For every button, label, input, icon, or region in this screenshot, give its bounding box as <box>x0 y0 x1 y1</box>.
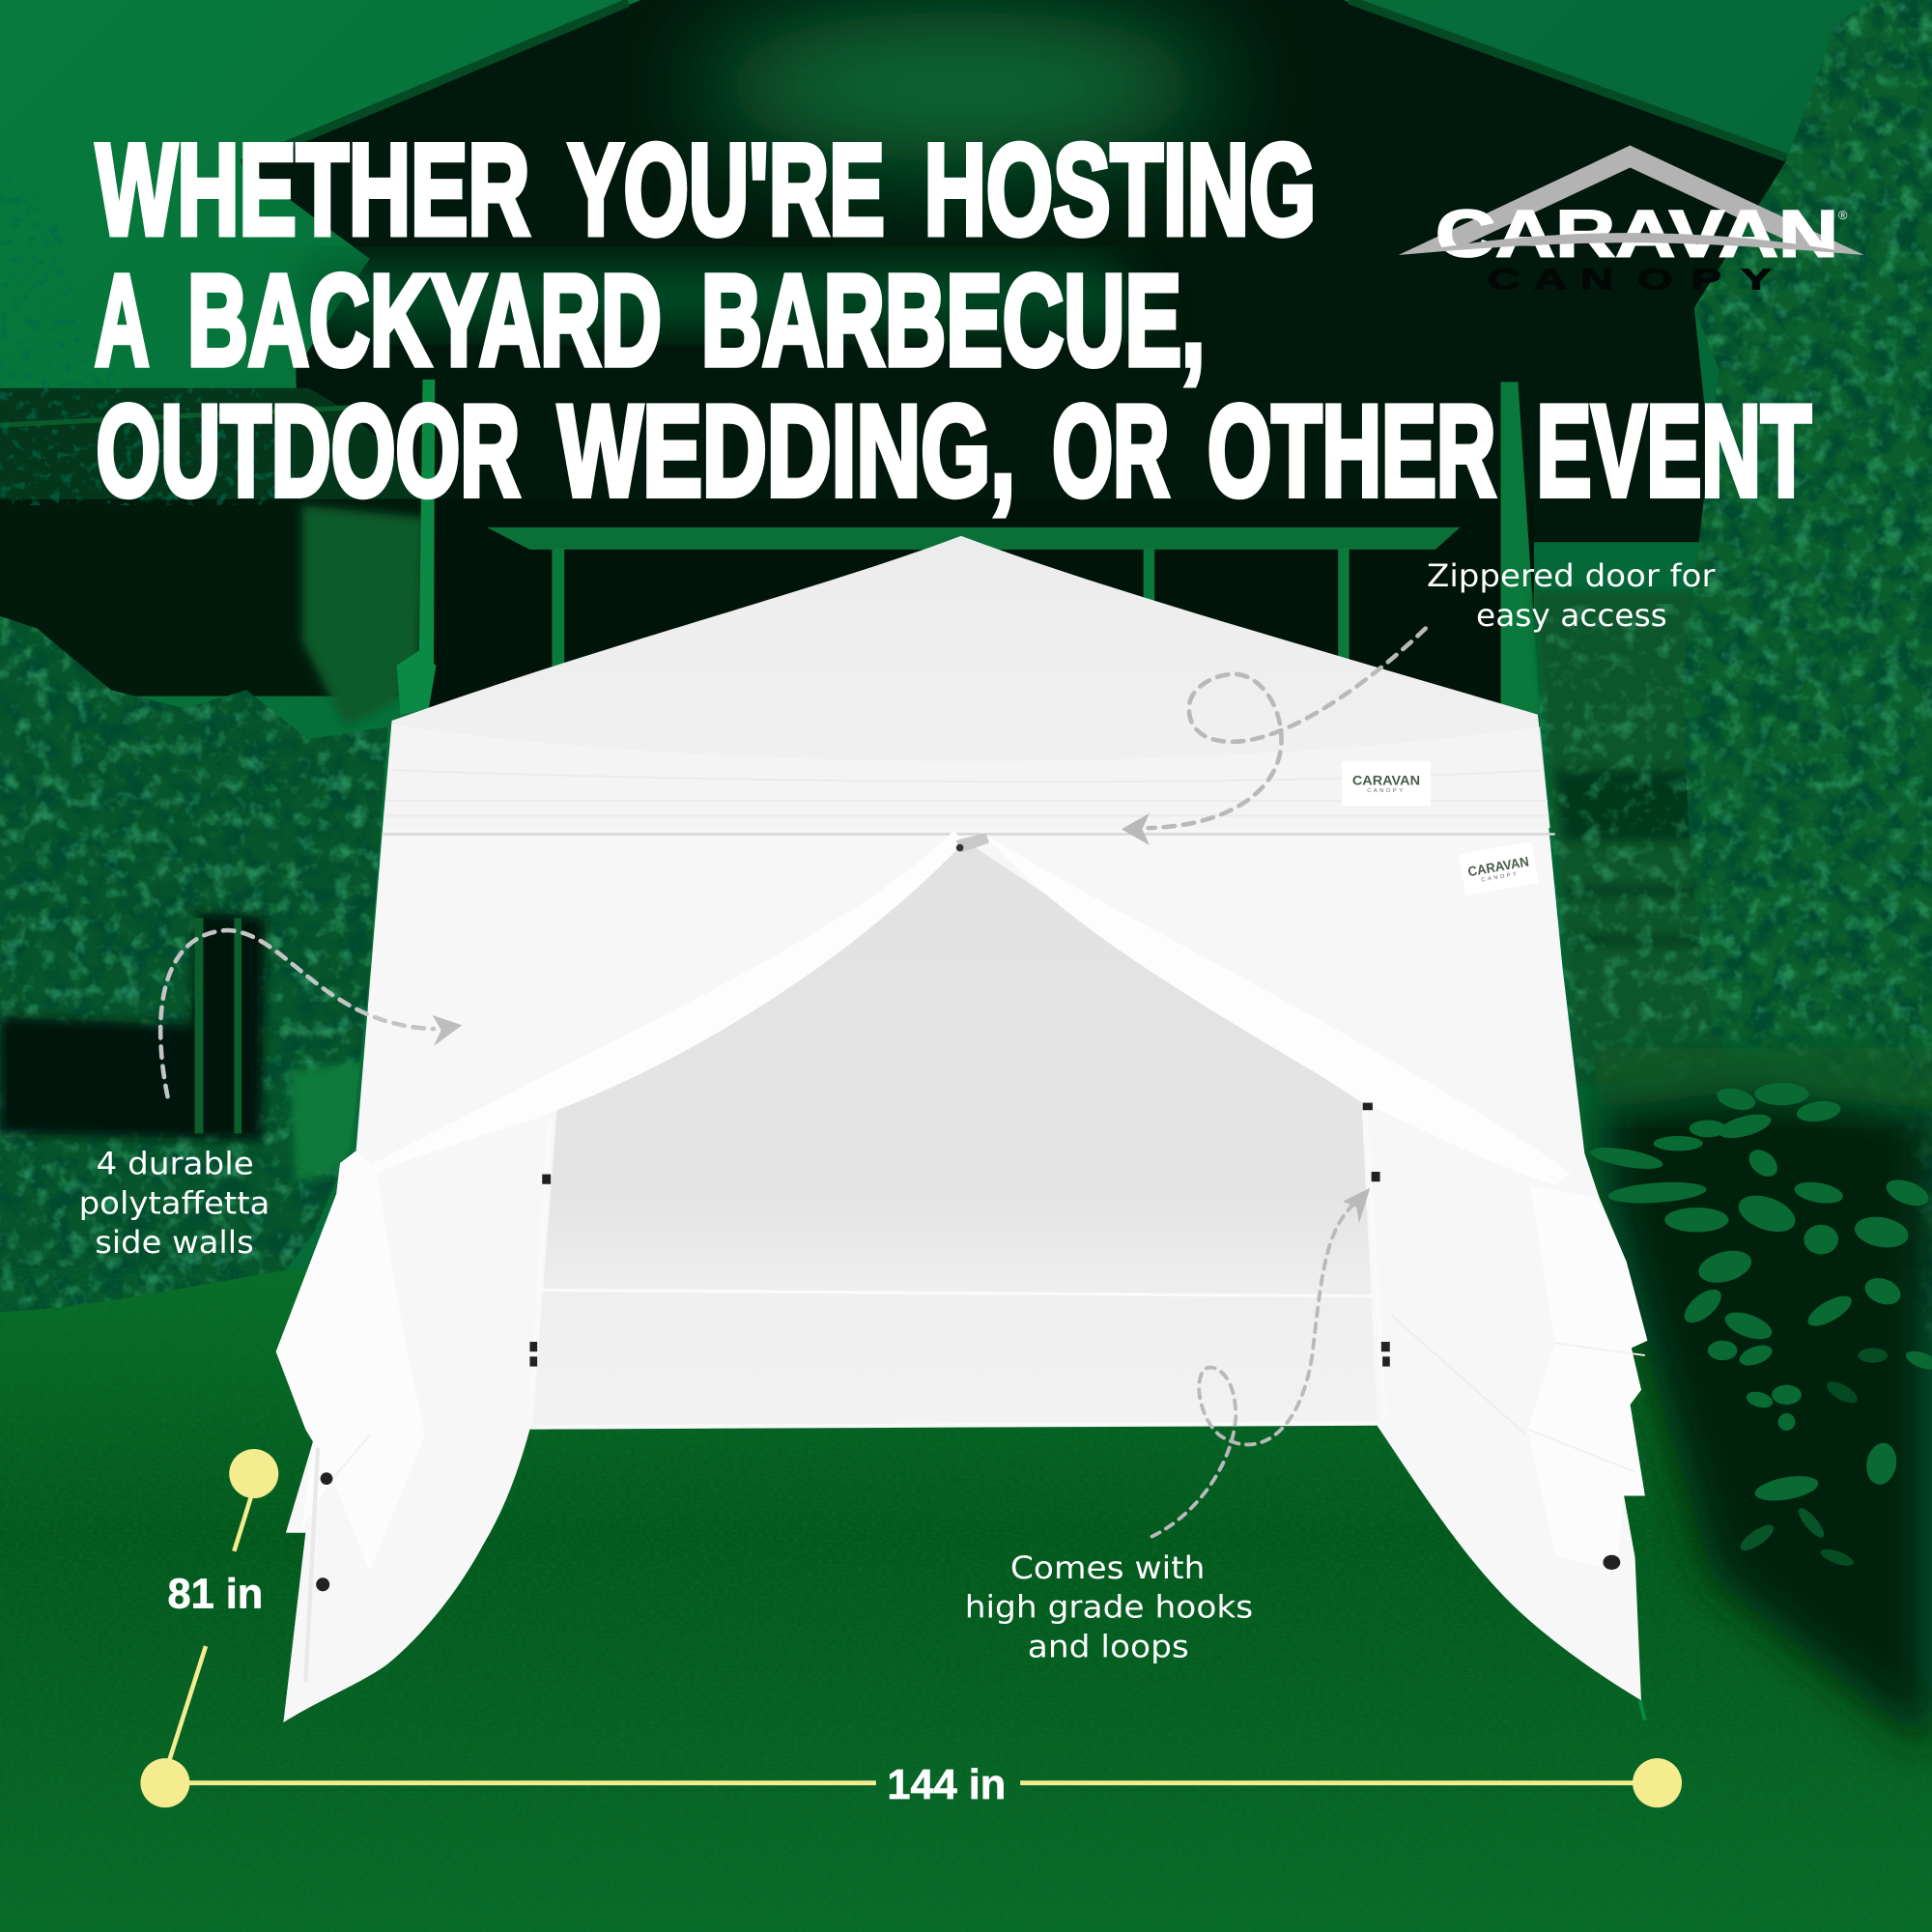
tent label on wall: CANOPY <box>1481 871 1520 884</box>
title: YOU'RE <box>568 118 885 262</box>
porch columns and posts <box>397 380 1540 715</box>
tent <box>276 536 1647 1722</box>
right door flap <box>980 832 1571 1185</box>
interior seam <box>540 1290 1375 1296</box>
valance <box>384 724 1550 828</box>
eave band <box>308 265 1158 327</box>
roof eave lines <box>242 0 1786 164</box>
frame left <box>531 1119 550 1417</box>
callout: side walls: side walls <box>95 1224 254 1261</box>
roof glow <box>702 13 1220 160</box>
left door flap <box>365 831 963 1173</box>
callout: hooks and loops: Comes with <box>1010 1549 1205 1586</box>
dimension: width 144 in: 144 in <box>887 1762 1006 1808</box>
tent label on valance <box>1342 761 1431 806</box>
grass lawn <box>0 1269 1932 1932</box>
arrow: side walls <box>160 930 462 1096</box>
tent silhouette and walls <box>276 536 1647 1722</box>
arrow: hooks and loops <box>1152 1188 1370 1537</box>
twigs upper left <box>0 196 294 505</box>
title: OR <box>1052 380 1169 524</box>
title: A <box>95 249 149 393</box>
house upper roof <box>242 0 1789 542</box>
title: BACKYARD <box>187 249 662 393</box>
callout: zippered door: Zippered door for <box>1427 557 1716 594</box>
dimension: height 81 in: 81 in <box>167 1572 263 1618</box>
tree right <box>1683 0 1932 1337</box>
logo: Caravan Canopy <box>1399 146 1864 297</box>
porch beam <box>487 527 1460 550</box>
title <box>95 118 1811 524</box>
tent label on valance: CARAVAN <box>1352 772 1420 787</box>
bush right leaves <box>1588 1083 1932 1569</box>
tent label on valance: CANOPY <box>1367 788 1406 794</box>
door top hardware <box>956 833 989 853</box>
title: OTHER <box>1208 380 1495 524</box>
tent peg <box>1640 1700 1645 1720</box>
logo: Caravan Canopy: ® <box>1838 208 1848 222</box>
title: WHETHER <box>96 118 529 262</box>
tent label on wall: CARAVAN <box>1466 853 1530 879</box>
logo: Caravan Canopy: CARAVAN <box>1435 196 1838 270</box>
callout: side walls: 4 durable <box>96 1146 254 1182</box>
callout: hooks and loops: and loops <box>1028 1629 1189 1665</box>
title: OUTDOOR <box>96 380 520 524</box>
callout: hooks and loops <box>965 1549 1253 1665</box>
bushes left <box>0 579 394 1319</box>
hardware clips <box>316 1103 1620 1591</box>
porch wedge <box>301 505 425 727</box>
lawn patch through bushes <box>290 1060 370 1182</box>
dimension: width 144 in <box>140 1758 1682 1808</box>
callout: zippered door <box>1427 557 1716 634</box>
gathered fabric left <box>276 1151 425 1571</box>
frame right <box>1365 1109 1385 1417</box>
title: BARBECUE, <box>701 249 1205 393</box>
tent label on wall <box>1459 841 1539 895</box>
gathered fabric right <box>1528 1185 1647 1571</box>
porch dark zone <box>425 499 1534 819</box>
arrow: zippered door <box>1122 629 1426 845</box>
callout: zippered door: easy access <box>1476 597 1667 634</box>
valance folds <box>385 770 1548 815</box>
title: WEDDING, <box>558 380 1015 524</box>
bush right dark base <box>1602 1072 1932 1749</box>
dark doorway <box>0 912 265 1140</box>
stone wall right of house <box>1533 591 1725 1084</box>
lower right seam <box>1392 1316 1525 1435</box>
callout: hooks and loops: high grade hooks <box>965 1589 1253 1626</box>
callout: side walls <box>79 1146 270 1261</box>
dimension: height 81 in <box>167 1449 278 1762</box>
tent roof <box>384 536 1550 828</box>
dark left yard <box>0 499 431 696</box>
logo: Caravan Canopy: CANOPY <box>1488 264 1772 297</box>
gathered folds right <box>1528 1343 1645 1472</box>
bush right mid foliage <box>1589 1047 1932 1109</box>
lower porch roof left <box>0 388 425 499</box>
tent interior back wall <box>532 839 1378 1430</box>
pole left <box>305 1448 318 1682</box>
callout: side walls: polytaffetta <box>79 1184 270 1221</box>
title: HOSTING <box>924 118 1316 262</box>
gathered folds left <box>332 1435 370 1479</box>
